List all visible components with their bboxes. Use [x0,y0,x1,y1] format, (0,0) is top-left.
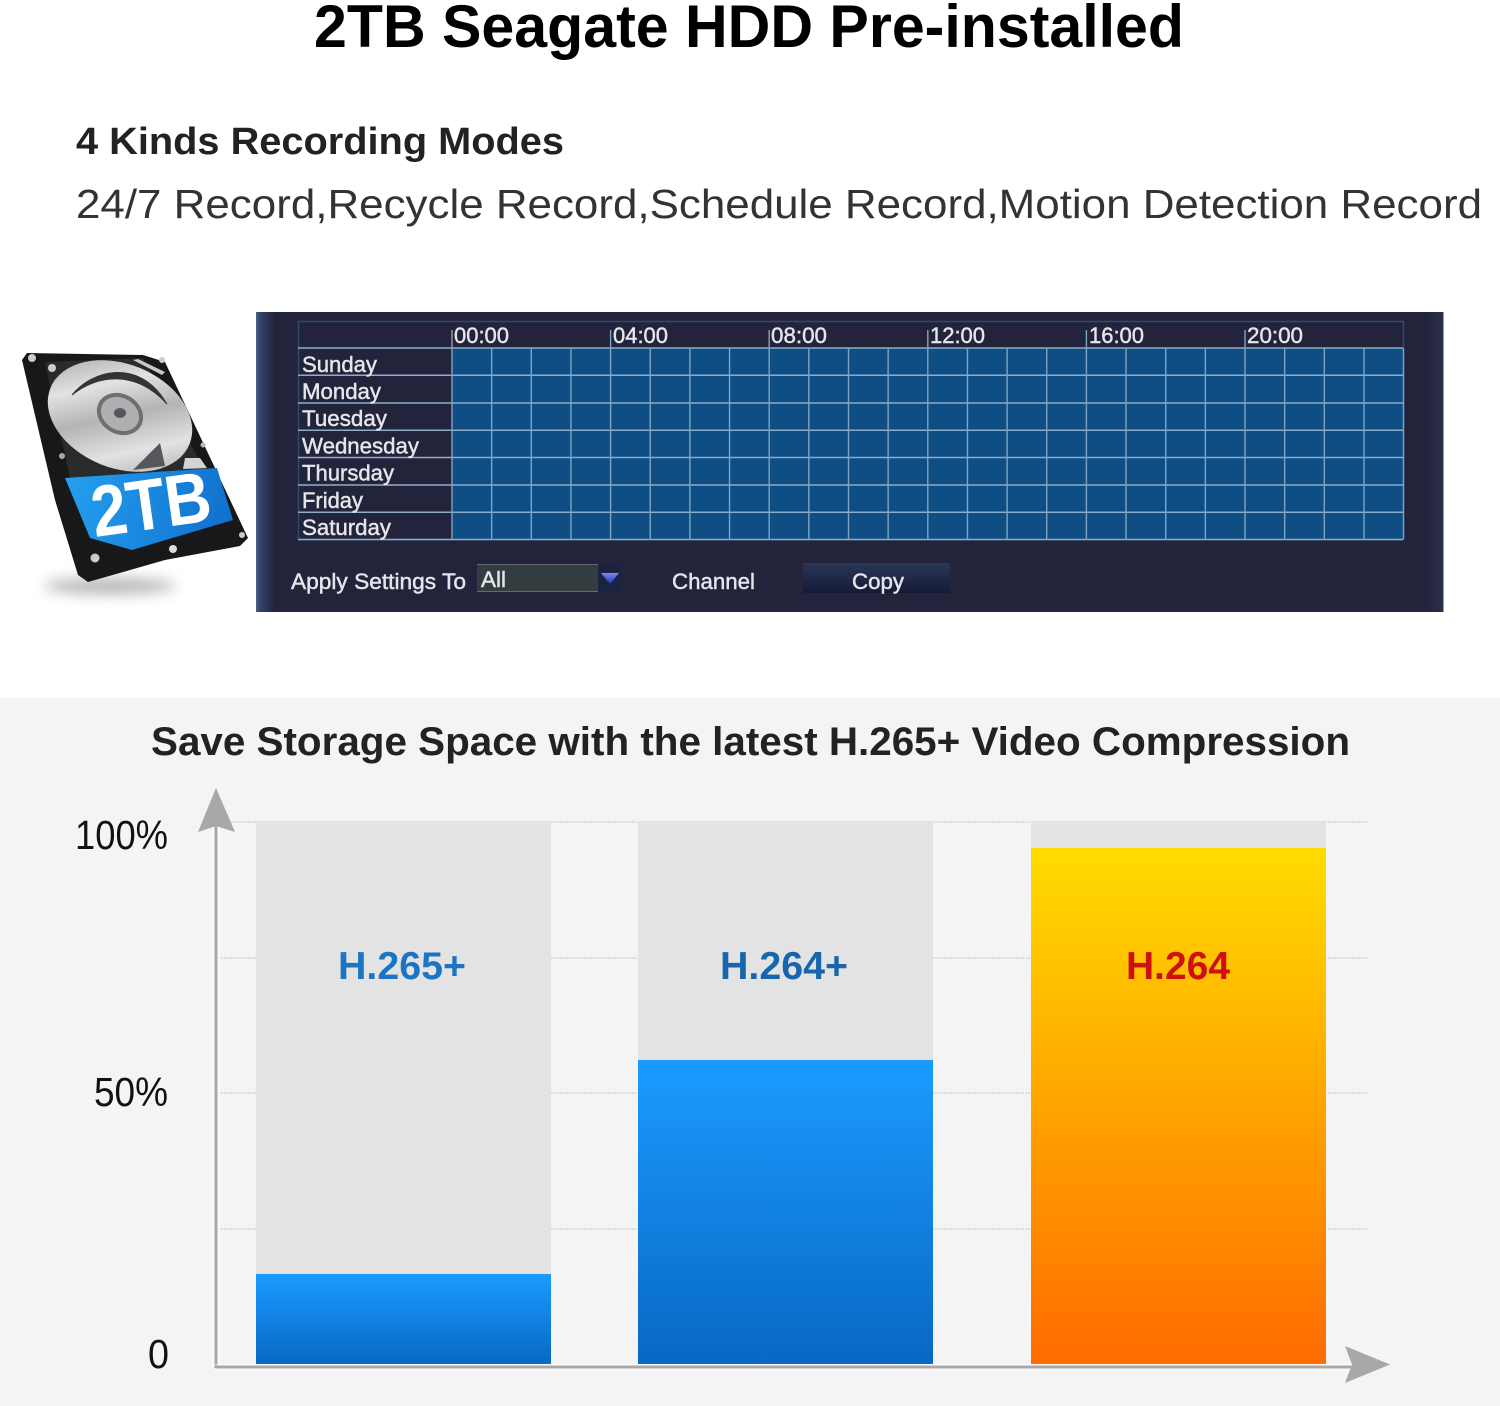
y axis labels: 50% [94,1069,168,1115]
apply settings control: Apply Settings To [291,569,466,594]
hour labels: 08:00 [771,323,827,348]
hour labels: 04:00 [613,323,668,348]
apply settings control: All [481,567,506,592]
bar: H.264+: H.264+ [720,945,848,988]
bar: H.265+: H.265+ [338,945,466,988]
bar: H.264 [1031,821,1326,1364]
arrow: x axis [215,1346,1390,1383]
icon: 2TB hard disk drive [22,340,248,594]
panel: recording schedule screen [256,312,1444,612]
weekday labels: Sunday [302,352,377,377]
copy button [803,563,950,594]
y axis labels: 0 [148,1331,169,1377]
y axis labels: 100% [75,812,168,858]
weekday labels: Saturday [302,515,391,540]
heading: compression: Save Storage Space with the latest H.265+ Video Compression [151,720,1350,764]
icon: 2TB hard disk drive: 2TB [86,457,216,553]
hour labels: 16:00 [1089,323,1144,348]
hour labels [454,323,1303,348]
schedule grid [298,322,1404,540]
weekday labels: Monday [302,379,381,404]
channel label: Channel [672,569,755,594]
hour labels: 12:00 [930,323,985,348]
heading: recording modes: 4 Kinds Recording Modes [76,121,564,163]
bar chart [218,821,1368,1364]
bar: H.264: H.264 [1126,945,1230,988]
weekday labels [302,352,419,540]
text: list of recording modes: 24/7 Record,Recycle Record,Schedule Record,Motion Detection Record [76,181,1482,227]
bar: H.264+ [638,821,933,1364]
apply settings control [291,564,621,594]
y axis labels [75,812,169,1377]
copy button: Copy [852,569,904,594]
arrow: y axis [198,788,235,1368]
weekday labels: Wednesday [302,434,419,458]
hour labels: 00:00 [454,323,509,348]
weekday labels: Thursday [302,460,394,486]
weekday labels: Tuesday [302,406,387,431]
bar: H.265+ [256,821,551,1364]
weekday labels: Friday [302,488,363,513]
hour labels: 20:00 [1247,323,1303,348]
panel: H.265+ compression chart [0,698,1500,1406]
